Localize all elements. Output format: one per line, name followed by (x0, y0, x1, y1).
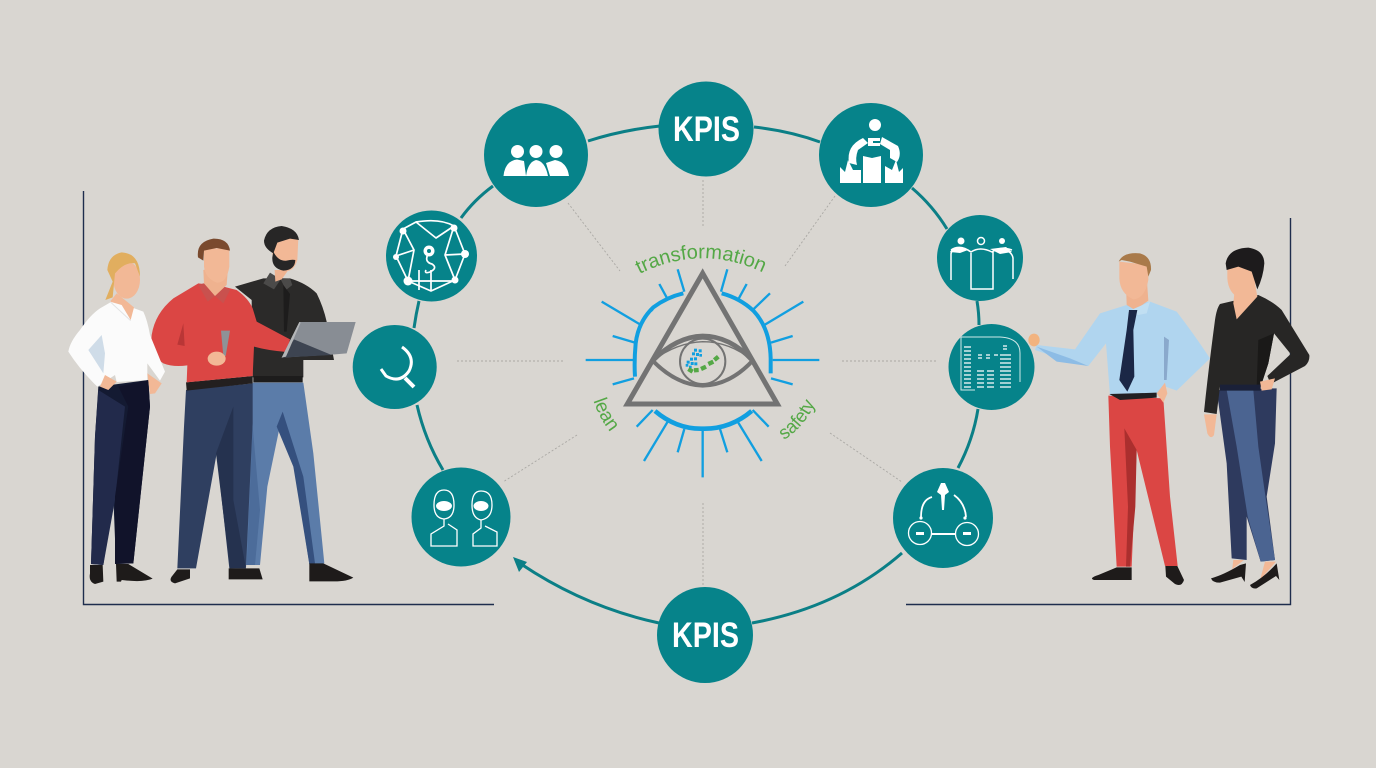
label: safety: safety (780, 399, 816, 439)
node: KPIS top: KPIS (673, 110, 740, 149)
label: lean: lean (594, 397, 617, 432)
label: transformation: transformation (635, 245, 766, 273)
node: KPIS bottom (657, 587, 753, 683)
cycle ring with arrow (414, 126, 979, 623)
node: network icon (386, 210, 477, 302)
node: cycle of groups icon (893, 468, 993, 568)
laptop (282, 322, 356, 358)
eye (653, 336, 753, 386)
dotted spokes (457, 180, 938, 585)
man with beard (235, 226, 353, 581)
blue sun arcs (635, 293, 771, 429)
woman in white blouse (68, 252, 165, 584)
man in blue shirt and red trousers (1028, 253, 1210, 585)
node: linked people icon (937, 215, 1023, 301)
node: data table icon (948, 324, 1034, 410)
right team (1028, 248, 1309, 589)
triangle (627, 273, 777, 404)
left team (68, 226, 356, 584)
node: KPIS top (658, 82, 754, 176)
node: two masked people icon (412, 468, 510, 566)
iris data dots (686, 349, 702, 368)
man in red shirt (151, 239, 290, 583)
blue sun rays (586, 269, 819, 477)
central emblem (586, 245, 820, 478)
woman in black top (1204, 248, 1309, 589)
node: KPIS bottom: KPIS (672, 616, 739, 655)
left frame (84, 191, 494, 604)
node: podium hands icon (819, 103, 923, 207)
node: team icon (484, 103, 588, 207)
right frame (906, 218, 1290, 604)
node: magnifier icon (353, 325, 437, 409)
iris green dashes (688, 357, 718, 372)
